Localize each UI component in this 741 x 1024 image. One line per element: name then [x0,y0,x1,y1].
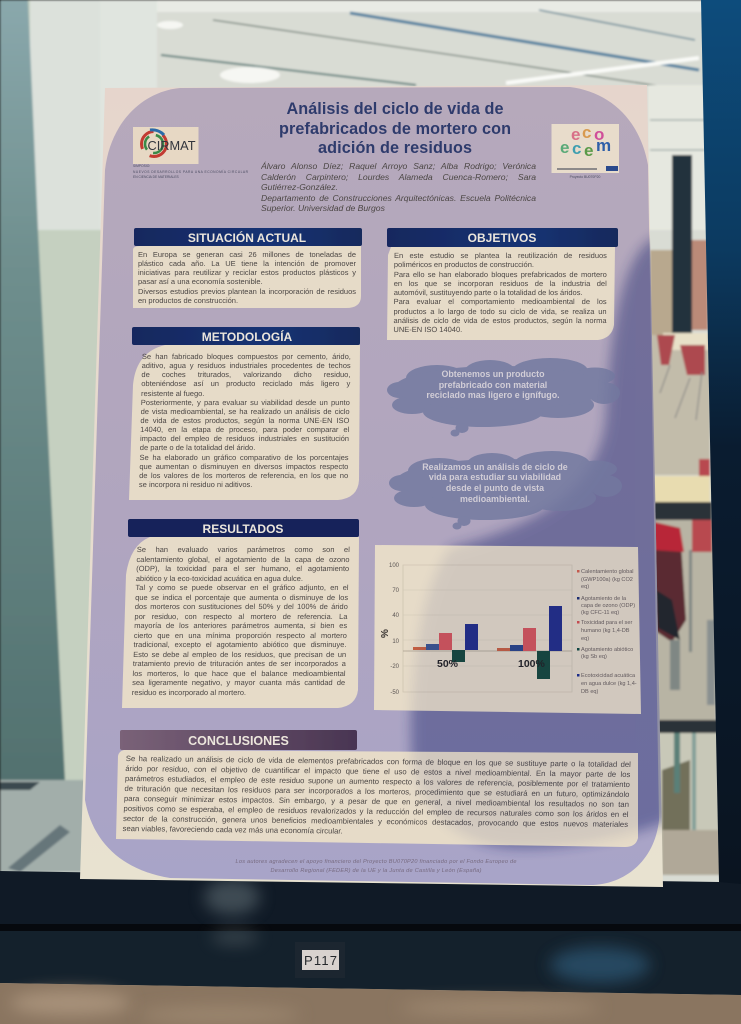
logo caption: symposium: NUEVOS DESARROLLOS PARA UNA ECONOMÍA CIRCULAR [133,170,249,174]
text: metodología: resistente al fuego. [141,388,205,397]
bar chart panel [374,545,641,714]
chart gridlines and axis labels [380,563,572,696]
text: metodología: de parte o de la totalidad del árido. [140,443,255,452]
logo: eco ecem: e [560,138,569,157]
text: conclusiones: sector de la construcción, genera unos beneficios medioambientales y económicos destacados, provocando que estos nuevos materiales [122,814,628,829]
text: resultados: por residuo, con respecto al mortero de referencia. La [134,611,348,620]
chart legend [577,569,637,695]
chart legend: Agotamiento de la [581,596,627,602]
text: situación actual: iniciativas para reutilizar y reciclar estos productos plásticos y [138,268,356,277]
text: conclusiones: parámetros estudiados, el empleo de este residuo supone un aumento respecto a los valores de referencia, posiblemente por el tratamiento [124,774,630,789]
chart legend: Ecotoxicidad acuática [581,673,636,679]
authors and affiliation: Álvaro Alonso Díez; Raquel Arroyo Sanz; Alba Rodrigo; Verónica [261,161,536,171]
text: resultados: calentamiento global, el agotamiento de la capa de ozono [136,554,350,563]
title: adición de residuos [318,139,472,157]
logo: eco ecem: m [596,136,611,155]
callout cloud: life cycle analysis: Realizamos un análisis de ciclo de [422,462,568,472]
logo: eco ecem: c [582,123,591,142]
text: situación actual: en productos de construcción. [138,296,238,305]
text: objetivos: Para ello se han elaborado bloques prefabricados de mortero [394,269,607,278]
text: metodología: que aumentan o disminuyen en diversos impactos respecto [139,461,349,470]
text: objetivos: En este estudio se plantea la reutilización de residuos [394,251,607,260]
text: resultados: residuo es incorporado al mortero. [132,688,246,697]
text: objetivos: automóvil, sustituyendo parte o la totalidad de los áridos. [394,288,583,297]
chart gridlines and axis labels: % [380,629,391,638]
title: prefabricados de mortero con [279,120,511,138]
poster purple background [85,87,659,885]
callout cloud: life cycle analysis [389,451,622,530]
text: metodología: aditivo, agua y residuos industriales procedentes de techos [142,361,351,370]
poster sheet [80,85,663,887]
chart gridlines and axis labels: 100 [389,563,400,569]
chart legend: (kg CFC-11 eq) [581,610,619,616]
logo: eco ecem: o [594,125,604,144]
chart gridlines and axis labels: -20 [390,664,400,670]
heading: situación actual [134,228,362,246]
panel: conclusiones [116,730,638,847]
text: metodología: de vida de estos productos, según la norma UNE-EN ISO [140,416,350,425]
title: Análisis del ciclo de vida de [286,100,504,118]
panel: resultados [122,519,359,708]
text: resultados: sea ligeramente negativo, y mayor cuanta más cantidad de [132,678,345,687]
callout cloud: lighter recycled product: prefabricado con material [439,380,547,390]
chart gridlines and axis labels: -50 [390,690,400,696]
text: metodología [130,352,360,498]
logo: eco ecem: Proyecto BU070P20 [570,175,600,179]
title [279,100,511,157]
text: metodología: Se han fabricado bloques compuestos por cemento, árido, [142,352,351,361]
text: metodología: de coches triturados, valorizando dicho residuo, [141,370,351,379]
text: conclusiones: positivos como se esperaba, el empleo de residuos revalorizados y la reducción del empleo de recursos naturales como son los áridos en el [123,804,628,819]
text: metodología: Se ha elaborado un gráfico comparativo de los porcentajes [140,452,349,461]
text: metodología: de los valores de los morteros de referencia, en los que no [139,471,348,480]
chart legend: humano (kg 1,4-DB [581,628,630,634]
logo: eco ecem: e [584,141,593,160]
logo caption: symposium [133,164,249,179]
acknowledgements: Los autores agradecen el apoyo financiero del Proyecto BU070P20 financiado por el Fondo Europeo de [236,859,516,865]
room label P117: P117 [304,953,337,968]
text: objetivos: productos a lo largo de todo su ciclo de vida, se realiza un [394,306,607,315]
panel: objetivos [387,228,618,340]
text: objetivos: análisis de ciclo de vida de estos productos, según la norma [393,316,607,325]
acknowledgements: Desarrollo Regional (FEDER) de la UE y la Junta de Castilla y León (España) [270,868,482,874]
text: conclusiones: árido por residuo, con el objetivo de cuantificar el impacto que tiene el uso de estos a nivel medioambiental. En la mayor parte de los [125,764,630,779]
text: metodología: Posteriormente, y para evaluar su viabilidad desde un punto [141,398,350,406]
text: objetivos: Para evaluar el comportamiento medioambiental de los [394,297,607,306]
authors and affiliation: Departamento de Construcciones Arquitectónicas. Escuela Politécnica [261,192,536,202]
text: resultados: mayoría de los anteriores parámetros aumenta, si bien es [134,621,347,630]
text: situación actual: pasar así a una economía sostenible. [138,277,263,286]
text: situación actual: plástico cada año. La UE tiene la intención de promover [138,259,356,268]
callout cloud: life cycle analysis: medioambiental. [460,494,530,504]
chart gridlines and axis labels: 70 [392,588,400,594]
chart legend: DB eq) [581,689,599,695]
heading: situación actual: SITUACIÓN ACTUAL [188,230,306,245]
heading: metodología: METODOLOGÍA [202,329,293,344]
text: resultados: (ODP), la toxicidad para el ser humano, el agotamiento [136,564,349,573]
chart gridlines and axis labels: 40 [392,613,400,619]
text: resultados: Tal y como se puede observar en el gráfico adjunto, en el [135,583,349,592]
text: resultados: tratamiento previo de trituración antes de ser incorporados a [133,659,346,668]
heading: resultados [128,519,359,537]
text: resultados: dos morteros con sustituciones del 50% y del 100% de árido [135,602,348,611]
room label P117 [295,942,345,978]
text: objetivos: en los que se incorporan residuos de la industria del [394,279,607,288]
heading: objetivos: OBJETIVOS [468,231,536,245]
text: resultados: cierto que en una mínima proporción respecto al mortero [134,630,347,639]
logo: eco ecem: c [572,139,581,158]
chart legend: (GWP100a) (kg CO2 [581,577,633,583]
panel: metodología [129,327,360,500]
authors and affiliation: Gutiérrez-González. [261,182,338,192]
logo: eco ecem [552,123,619,179]
reflection shadow over the panels [411,235,670,848]
chart legend: eq) [581,636,589,642]
text: metodología: 14040, en la etapa de proceso, para poder comparar el [140,425,349,434]
heading: conclusiones: CONCLUSIONES [188,734,289,748]
text: conclusiones: sean viables, favoreciendo cada vez más una economía circular. [122,824,342,836]
text: objetivos [390,251,612,339]
acknowledgements [236,859,516,874]
text: metodología: se incorpora ni residuo ni aditivos. [139,480,253,489]
text: situación actual: En Europa se generan casi 26 millones de toneladas de [138,250,356,259]
text: situación actual [138,250,357,308]
callout cloud: lighter recycled product [387,358,620,436]
text: conclusiones: de trituración que necesitan los residuos para ser incorporados a los morteros, procedimiento que se estudiará en un futuro, optimizándolo [124,784,629,799]
chart legend: eq) [581,584,589,590]
text: objetivos: poliméricos en productos de construcción. [394,260,534,269]
logo caption: symposium: SIMPOSIO: [133,164,150,168]
text: resultados [123,545,359,705]
panel: situación actual [133,228,362,308]
authors and affiliation: Calderón Carpintero; Lourdes Alameda Cuenca-Romero; Sara [261,172,536,182]
chart legend: (kg Sb eq) [581,654,607,660]
heading: resultados: RESULTADOS [203,522,283,536]
logo: CIRMAT [133,127,198,164]
bars: 100% [497,606,562,679]
bars: 50%: 50% [437,658,459,670]
reflection shadow on the purple background [411,235,670,848]
text: resultados: tradicional, excepto el agotamiento abiótico que disminuye. [133,640,347,649]
text: resultados: Se han evaluado varios parámetros como son el [137,545,350,554]
text: resultados: abiótico y la eco-toxicidad acuática en agua dulce. [136,573,303,582]
callout cloud: life cycle analysis: vida para estudiar su viabilidad [429,472,561,482]
logo caption: symposium: EN CIENCIA DE MATERIALES [133,175,180,179]
callout cloud: lighter recycled product: Obtenemos un producto [441,369,545,379]
stone ledge [0,983,741,1024]
text: resultados: los morteros, lo que hace que el balance medioambiental [132,668,346,678]
text: resultados: que se indica el porcentaje que aumenta o disminuye de los [135,592,348,601]
chart legend: en agua dulce (kg 1,4- [581,681,637,687]
text: metodología: de vista medioambiental, se ha realizado un análisis de ciclo [141,407,350,416]
chart legend: Agotamiento abiótico [581,647,633,653]
text: resultados: Esto se debe al empleo de los residuos, que precisan de un [133,649,346,658]
chart legend: capa de ozono (ODP) [581,603,635,609]
bars: 50% [413,624,478,670]
text: conclusiones: para conseguir minimizar estos impactos. Sin embargo, y a pesar de que en general, a nivel medioambiental los resultados no son tan [123,794,629,809]
logo: eco ecem: e [571,125,580,144]
heading: conclusiones [120,730,357,750]
chart legend: Calentamiento global [581,569,634,575]
text: objetivos: UNE-EN ISO 14040. [393,325,462,334]
text: metodología: obteniéndose así un producto reciclado más ligero y [141,379,350,388]
authors and affiliation: Superior. Universidad de Burgos [261,203,385,213]
text: metodología: impacto del empleo de residuos industriales en sustitución [140,434,349,443]
chart gridlines and axis labels: 10 [392,639,400,645]
authors and affiliation [261,161,537,217]
logo: CIRMAT: CIRMAT [148,138,196,153]
text: conclusiones [117,754,638,844]
text: conclusiones: Se ha realizado un análisis de ciclo de vida de elementos prefabricados con forma de bloque en los que se sustituye parte o la totalidad del [125,754,631,769]
callout cloud: lighter recycled product: reciclado mas ligero e ignífugo. [426,390,560,400]
callout cloud: life cycle analysis: desde el punto de vista [446,483,544,493]
heading: metodología [132,327,360,345]
text: situación actual: Diversos estudios previos plantean la incorporación de residuos [138,287,356,296]
bars: 100%: 100% [518,658,546,670]
chart legend: Toxicidad para el ser [581,620,632,626]
heading: objetivos [387,228,618,247]
